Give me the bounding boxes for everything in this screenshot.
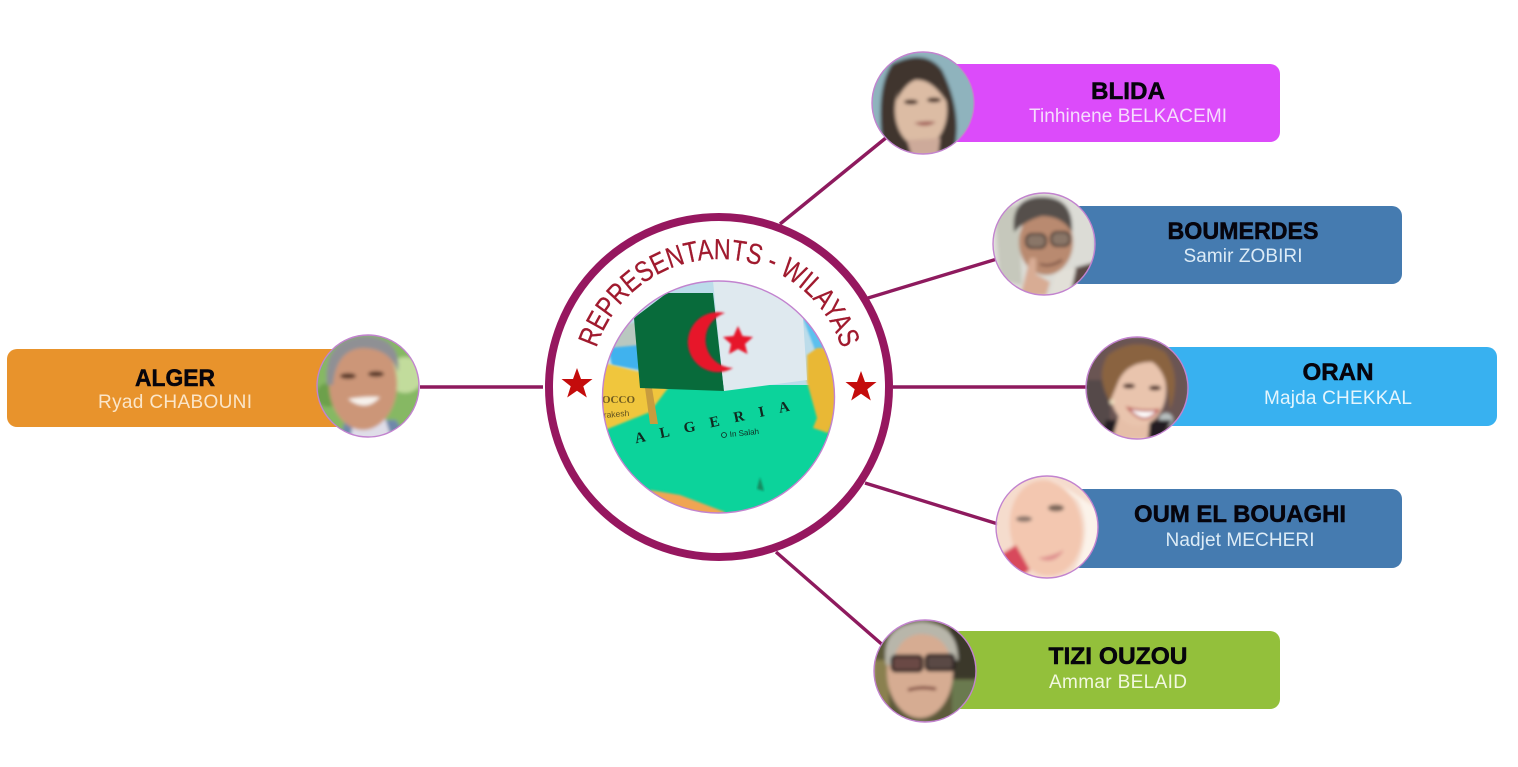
label bar: [945, 64, 1280, 142]
label bar: [950, 631, 1280, 709]
central badge: [545, 213, 893, 561]
map label Marrakesh: rakesh: [603, 408, 630, 420]
flag white half: [713, 281, 807, 391]
label bar: [7, 349, 347, 427]
portrait: [873, 619, 978, 723]
region name: ALGER: [135, 365, 215, 392]
label bar: [1160, 347, 1497, 426]
curved title: REPRESENTANTS - WILAYAS: [578, 239, 859, 346]
card: Alger: [7, 333, 423, 440]
card: Blida: [870, 50, 1280, 156]
portrait: [992, 192, 1096, 296]
star right: [846, 371, 876, 400]
portrait: [995, 475, 1100, 581]
representative name: Majda CHEKKAL: [1264, 388, 1412, 409]
map label Algeria: ALGERIA: [633, 399, 791, 447]
representative name: Samir ZOBIRI: [1184, 246, 1302, 267]
region name: BLIDA: [1091, 78, 1165, 105]
portrait: [1085, 336, 1189, 440]
badge ring: [549, 217, 889, 557]
flag green half: [634, 293, 724, 391]
star left: [562, 368, 592, 398]
label bar: [1070, 206, 1402, 284]
map and flag photo: [600, 279, 840, 520]
label bar: [1070, 489, 1402, 568]
flag pole: [645, 388, 658, 424]
card: Oran: [1085, 336, 1497, 440]
region name: ORAN: [1302, 359, 1374, 386]
card: Boumerdes: [992, 192, 1402, 296]
portrait: [315, 333, 423, 440]
map label Morocco: OCCO: [602, 394, 635, 406]
card: Tizi Ouzou: [873, 619, 1280, 723]
connector lines: [420, 137, 1088, 647]
region name: OUM EL BOUAGHI: [1134, 501, 1346, 528]
representative name: Ryad CHABOUNI: [98, 392, 252, 413]
flag star: [723, 326, 753, 354]
card: Oum El Bouaghi: [995, 475, 1402, 581]
crescent: [688, 312, 733, 372]
map label In Salah: In Salah: [729, 427, 759, 439]
region name: BOUMERDES: [1168, 218, 1318, 245]
representative name: Ammar BELAID: [1049, 672, 1187, 693]
portrait: [870, 50, 976, 156]
representative name: Tinhinene BELKACEMI: [1029, 106, 1227, 127]
region name: TIZI OUZOU: [1048, 643, 1188, 670]
representative name: Nadjet MECHERI: [1166, 530, 1314, 551]
